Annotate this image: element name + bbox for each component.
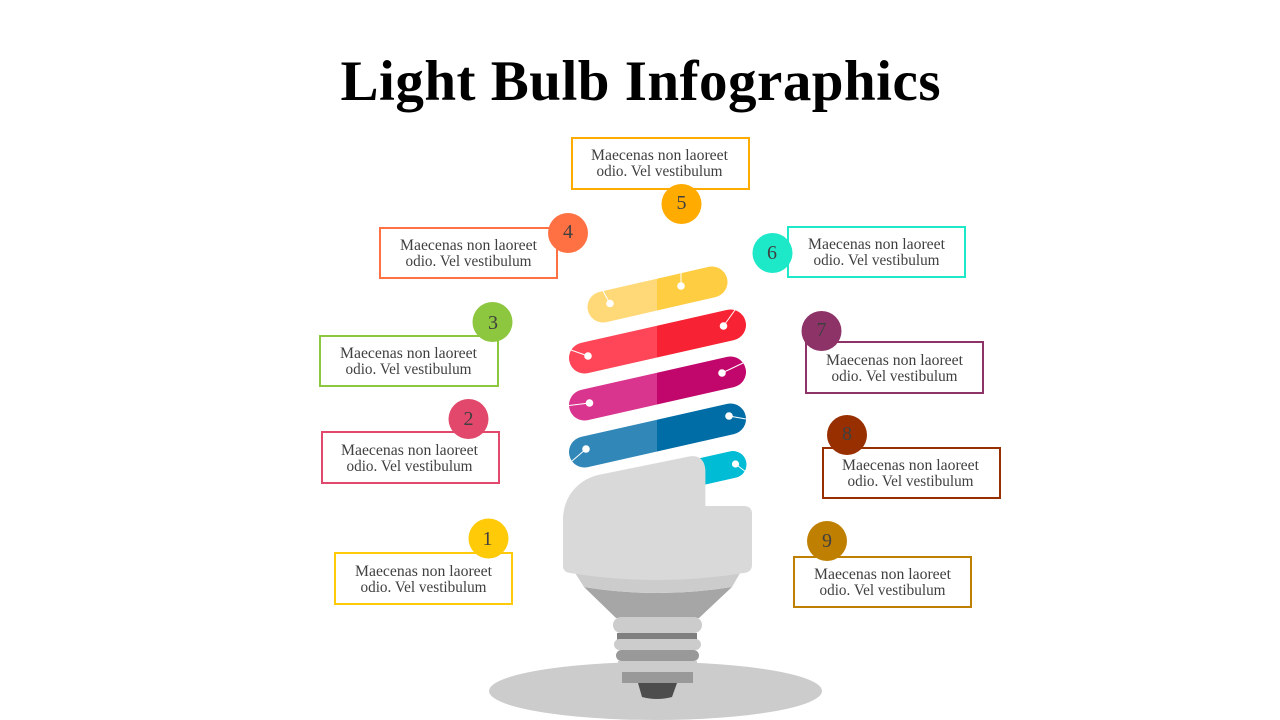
callout 5 [572,138,749,224]
callout 8 [823,415,1000,498]
callout 3: Maecenas non laoreet [340,345,478,362]
collar: dark cone [584,587,732,618]
callout 2: 2 [464,408,474,430]
callout 3 [320,302,512,386]
spiral segment: magenta [569,363,743,407]
callout 9 [794,521,971,607]
spiral segment: cyan [670,460,746,479]
callout 2: Maecenas non laoreet [341,442,479,459]
callout 8: 8 [842,423,852,445]
light bulb illustration [489,273,822,720]
spiral segment: yellow [603,273,712,307]
callout 6: Maecenas non laoreet [808,236,946,253]
callout 4: odio. Vel vestibulum [406,253,532,270]
spiral segment: blue [572,412,746,461]
spiral segment: red [571,310,735,360]
callout 6: 6 [767,242,777,264]
callout 1: 1 [482,528,492,550]
callout 6 [752,227,965,277]
bulb housing [563,456,752,580]
callout 7: odio. Vel vestibulum [832,368,958,385]
callout 3: 3 [488,312,498,334]
callout 1: odio. Vel vestibulum [360,579,486,596]
callout 9: odio. Vel vestibulum [820,582,946,599]
callout 5: Maecenas non laoreet [591,147,729,164]
callout 7: Maecenas non laoreet [826,352,964,369]
callout 9: 9 [822,530,832,552]
callout 5: odio. Vel vestibulum [596,163,722,180]
callout 2 [322,399,499,483]
callout 7: 7 [816,319,826,341]
callout 9: Maecenas non laoreet [814,566,952,583]
callout 5: 5 [676,192,686,214]
callout 8: odio. Vel vestibulum [848,473,974,490]
callout 4: Maecenas non laoreet [400,237,538,254]
callout 7 [802,311,983,393]
callout 6: odio. Vel vestibulum [814,252,940,269]
callout 8: Maecenas non laoreet [842,457,980,474]
screw base [613,617,702,699]
collar: light band [572,568,743,593]
callout 1: Maecenas non laoreet [355,563,493,580]
callout 4 [380,213,588,278]
ground shadow [489,662,822,720]
callout 3: odio. Vel vestibulum [346,361,472,378]
callout 1 [335,518,512,604]
callout 4: 4 [563,221,573,243]
callout 2: odio. Vel vestibulum [346,458,472,475]
title: Light Bulb Infographics [340,50,940,113]
